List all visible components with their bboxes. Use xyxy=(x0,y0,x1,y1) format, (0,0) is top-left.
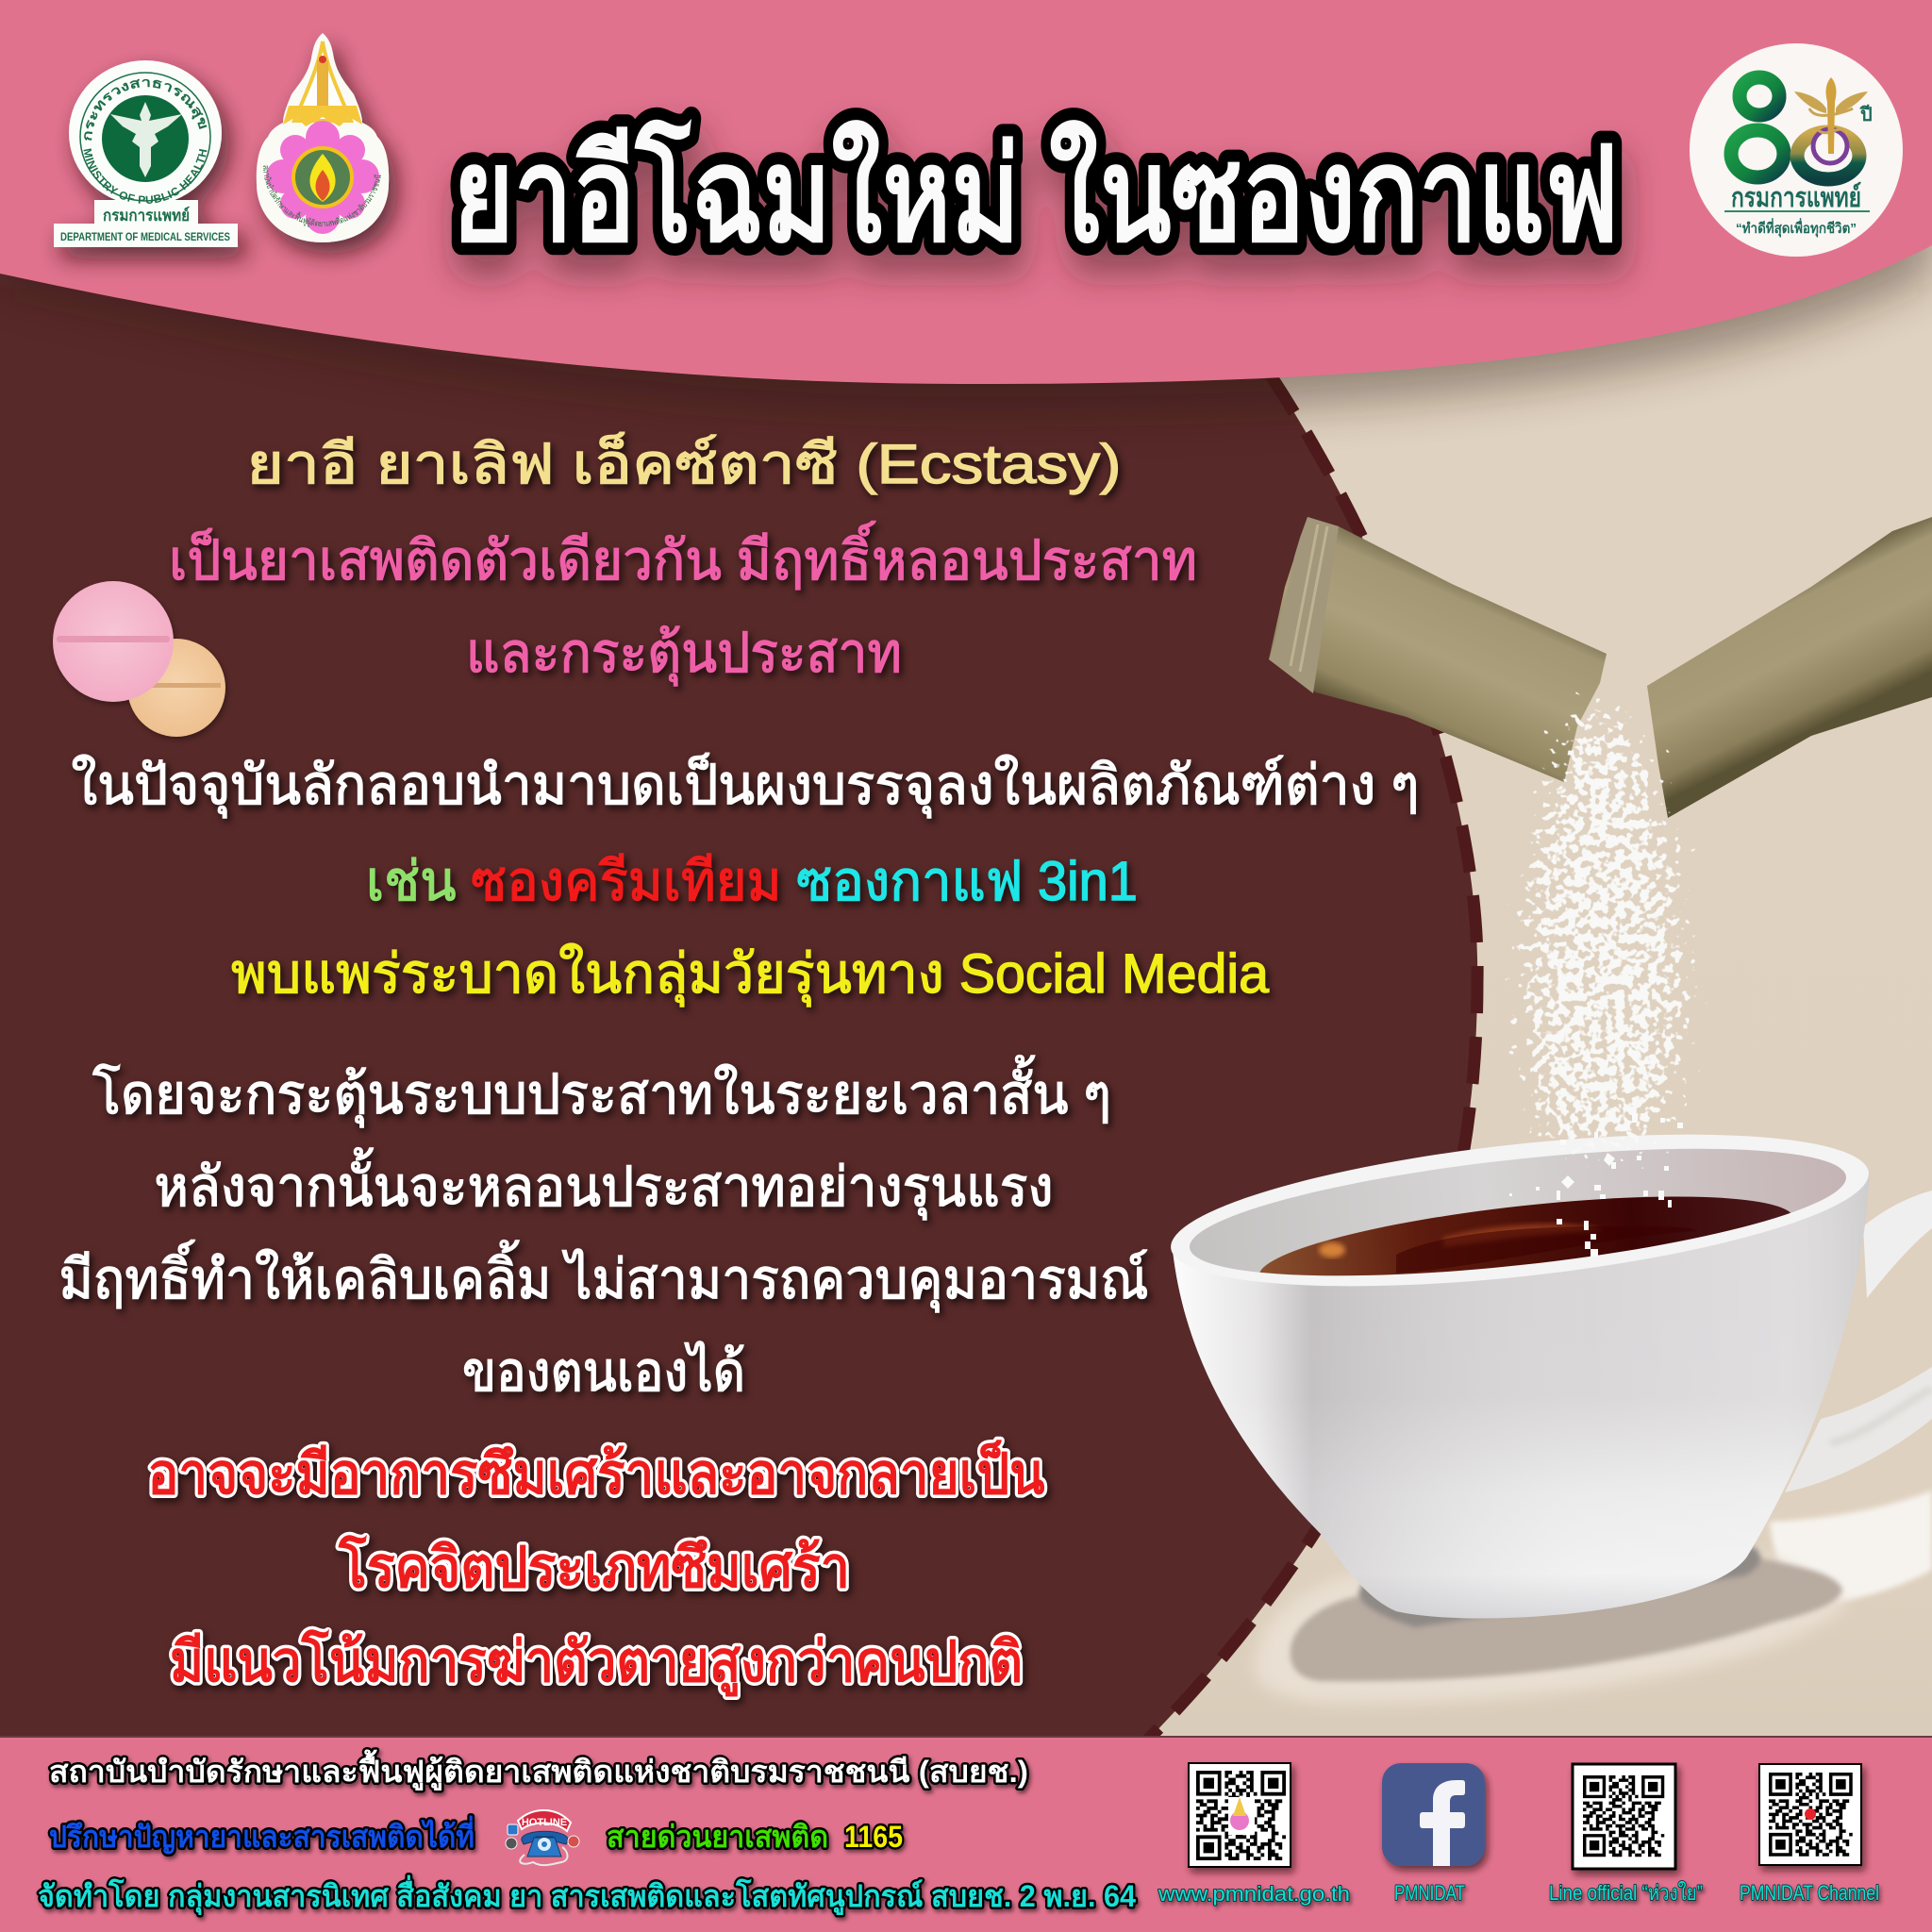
cup rim xyxy=(1164,1107,1875,1314)
illustration: torn sachet left xyxy=(1269,517,1607,782)
effects line three: มีฤทธิ์ทำให้เคลิบเคลิ้ม ไม่สามารถควบคุมอารมณ์ xyxy=(58,1240,1149,1313)
icon: QR code Line official xyxy=(1573,1764,1675,1869)
footer: credit line: จัดทำโดย กลุ่มงานสารนิเทศ สื่อสังคม ยา สารเสพติดและโสตทัศนูปกรณ์ สบยช. 2 พ.ย. 64 xyxy=(38,1874,1136,1916)
text block: warning xyxy=(147,1440,1045,1697)
label: channel: PMNIDAT Channel xyxy=(1740,1881,1879,1905)
icon: QR code website xyxy=(1189,1763,1291,1867)
effects line four: ของตนเองได้ xyxy=(462,1341,745,1403)
logo: Department of Medical Services xyxy=(45,55,260,275)
label: website: www.pmnidat.go.th xyxy=(1158,1882,1350,1906)
footer: hotline label: สายด่วนยาเสพติด xyxy=(607,1820,828,1854)
digit 8 xyxy=(1731,77,1784,177)
logo: Department of Medical Services: กระทรวงสาธารณสุข xyxy=(84,79,208,142)
dashed panel edge xyxy=(1147,373,1477,1740)
label: Line official: Line official “ห่วงใย” xyxy=(1549,1881,1703,1905)
label: department name: กรมการแพทย์ xyxy=(1731,181,1861,213)
logo: Department of Medical Services: DEPARTMENT OF MEDICAL SERVICES xyxy=(60,230,230,243)
warning line one: อาจจะมีอาการซึมเศร้าและอาจกลายเป็น xyxy=(147,1440,1045,1506)
icon: hotline telephone: HOTLINE xyxy=(522,1817,567,1828)
coffee surface xyxy=(1259,1196,1790,1275)
text block: current spread xyxy=(72,753,1419,1008)
panel: footer band xyxy=(0,1736,1932,1932)
logo: 80 years Department of Medical Services xyxy=(1690,43,1903,257)
text block: intro xyxy=(169,432,1197,687)
illustration: saucer and cup shadow xyxy=(1255,1491,1932,1703)
effects line two: หลังจากนั้นจะหลอนประสาทอย่างรุนแรง xyxy=(155,1148,1053,1221)
logo: institute lotus crest: สถาบันบำบัดรักษาและฟื้นฟูผู้ติดยาเสพติดแห่งชาติบรมราชชนนี xyxy=(263,165,381,227)
illustration: falling sugar xyxy=(1515,691,1694,1156)
icon: QR code channel xyxy=(1759,1764,1861,1865)
white line: ในปัจจุบันลักลอบนำมาบดเป็นผงบรรจุลงในผลิตภัณฑ์ต่าง ๆ xyxy=(72,753,1419,819)
yellow line: พบแพร่ระบาดในกลุ่มวัยรุ่นทาง Social Media xyxy=(231,942,1270,1008)
pink line two: และกระตุ้นประสาท xyxy=(466,623,902,687)
icon: hotline telephone xyxy=(506,1810,579,1865)
icon: Facebook xyxy=(1382,1763,1485,1866)
coloured examples line: เช่น ซองครีมเทียม ซองกาแฟ 3in1 xyxy=(366,851,1138,912)
digit 0 with caduceus xyxy=(1794,77,1868,179)
pink line one: เป็นยาเสพติดตัวเดียวกัน มีฤทธิ์หลอนประสาท xyxy=(169,521,1197,591)
logo: institute lotus crest xyxy=(247,33,413,270)
header shadow xyxy=(4,245,1932,432)
warning line three: มีแนวโน้มการฆ่าตัวตายสูงกว่าคนปกติ xyxy=(170,1628,1023,1697)
label: Facebook page: PMNIDAT xyxy=(1394,1881,1465,1905)
panel: dark brown text panel xyxy=(0,255,1477,1740)
heading line: ยาอี ยาเลิฟ เอ็คซ์ตาซี (Ecstasy) xyxy=(247,432,1121,495)
logo: Department of Medical Services: MINISTRY OF PUBLIC HEALTH xyxy=(83,148,208,204)
footer: hotline number: 1165 xyxy=(844,1820,903,1854)
illustration: coffee cup body xyxy=(1164,1107,1875,1618)
cup inner wall xyxy=(1184,1124,1852,1300)
warning line two: โรคจิตประเภทซึมเศร้า xyxy=(338,1534,850,1599)
footer: institute name: สถาบันบำบัดรักษาและฟื้นฟูผู้ติดยาเสพติดแห่งชาติบรมราชชนนี (สบยช.) xyxy=(49,1749,1028,1791)
title: ยาอีโฉมใหม่ ในซองกาแฟ xyxy=(453,119,1619,269)
illustration: sugar specks over cup xyxy=(1509,1113,1683,1257)
effects line one: โดยจะกระตุ้นระบบประสาทในระยะเวลาสั้น ๆ xyxy=(92,1056,1111,1128)
label: years: ปี xyxy=(1859,104,1873,125)
text block: effects xyxy=(58,1056,1149,1403)
icon: pills xyxy=(53,581,225,737)
header: pink curved band xyxy=(0,0,1932,384)
illustration: torn sachet right xyxy=(1647,517,1932,818)
label: slogan: “ทำดีที่สุดเพื่อทุกชีวิต” xyxy=(1736,218,1857,238)
logo: Department of Medical Services: กรมการแพทย์ xyxy=(103,206,190,225)
footer: consult line: ปรึกษาปัญหายาและสารเสพติดได้ที่ xyxy=(49,1815,475,1855)
illustration: cup handle xyxy=(1785,1191,1932,1492)
